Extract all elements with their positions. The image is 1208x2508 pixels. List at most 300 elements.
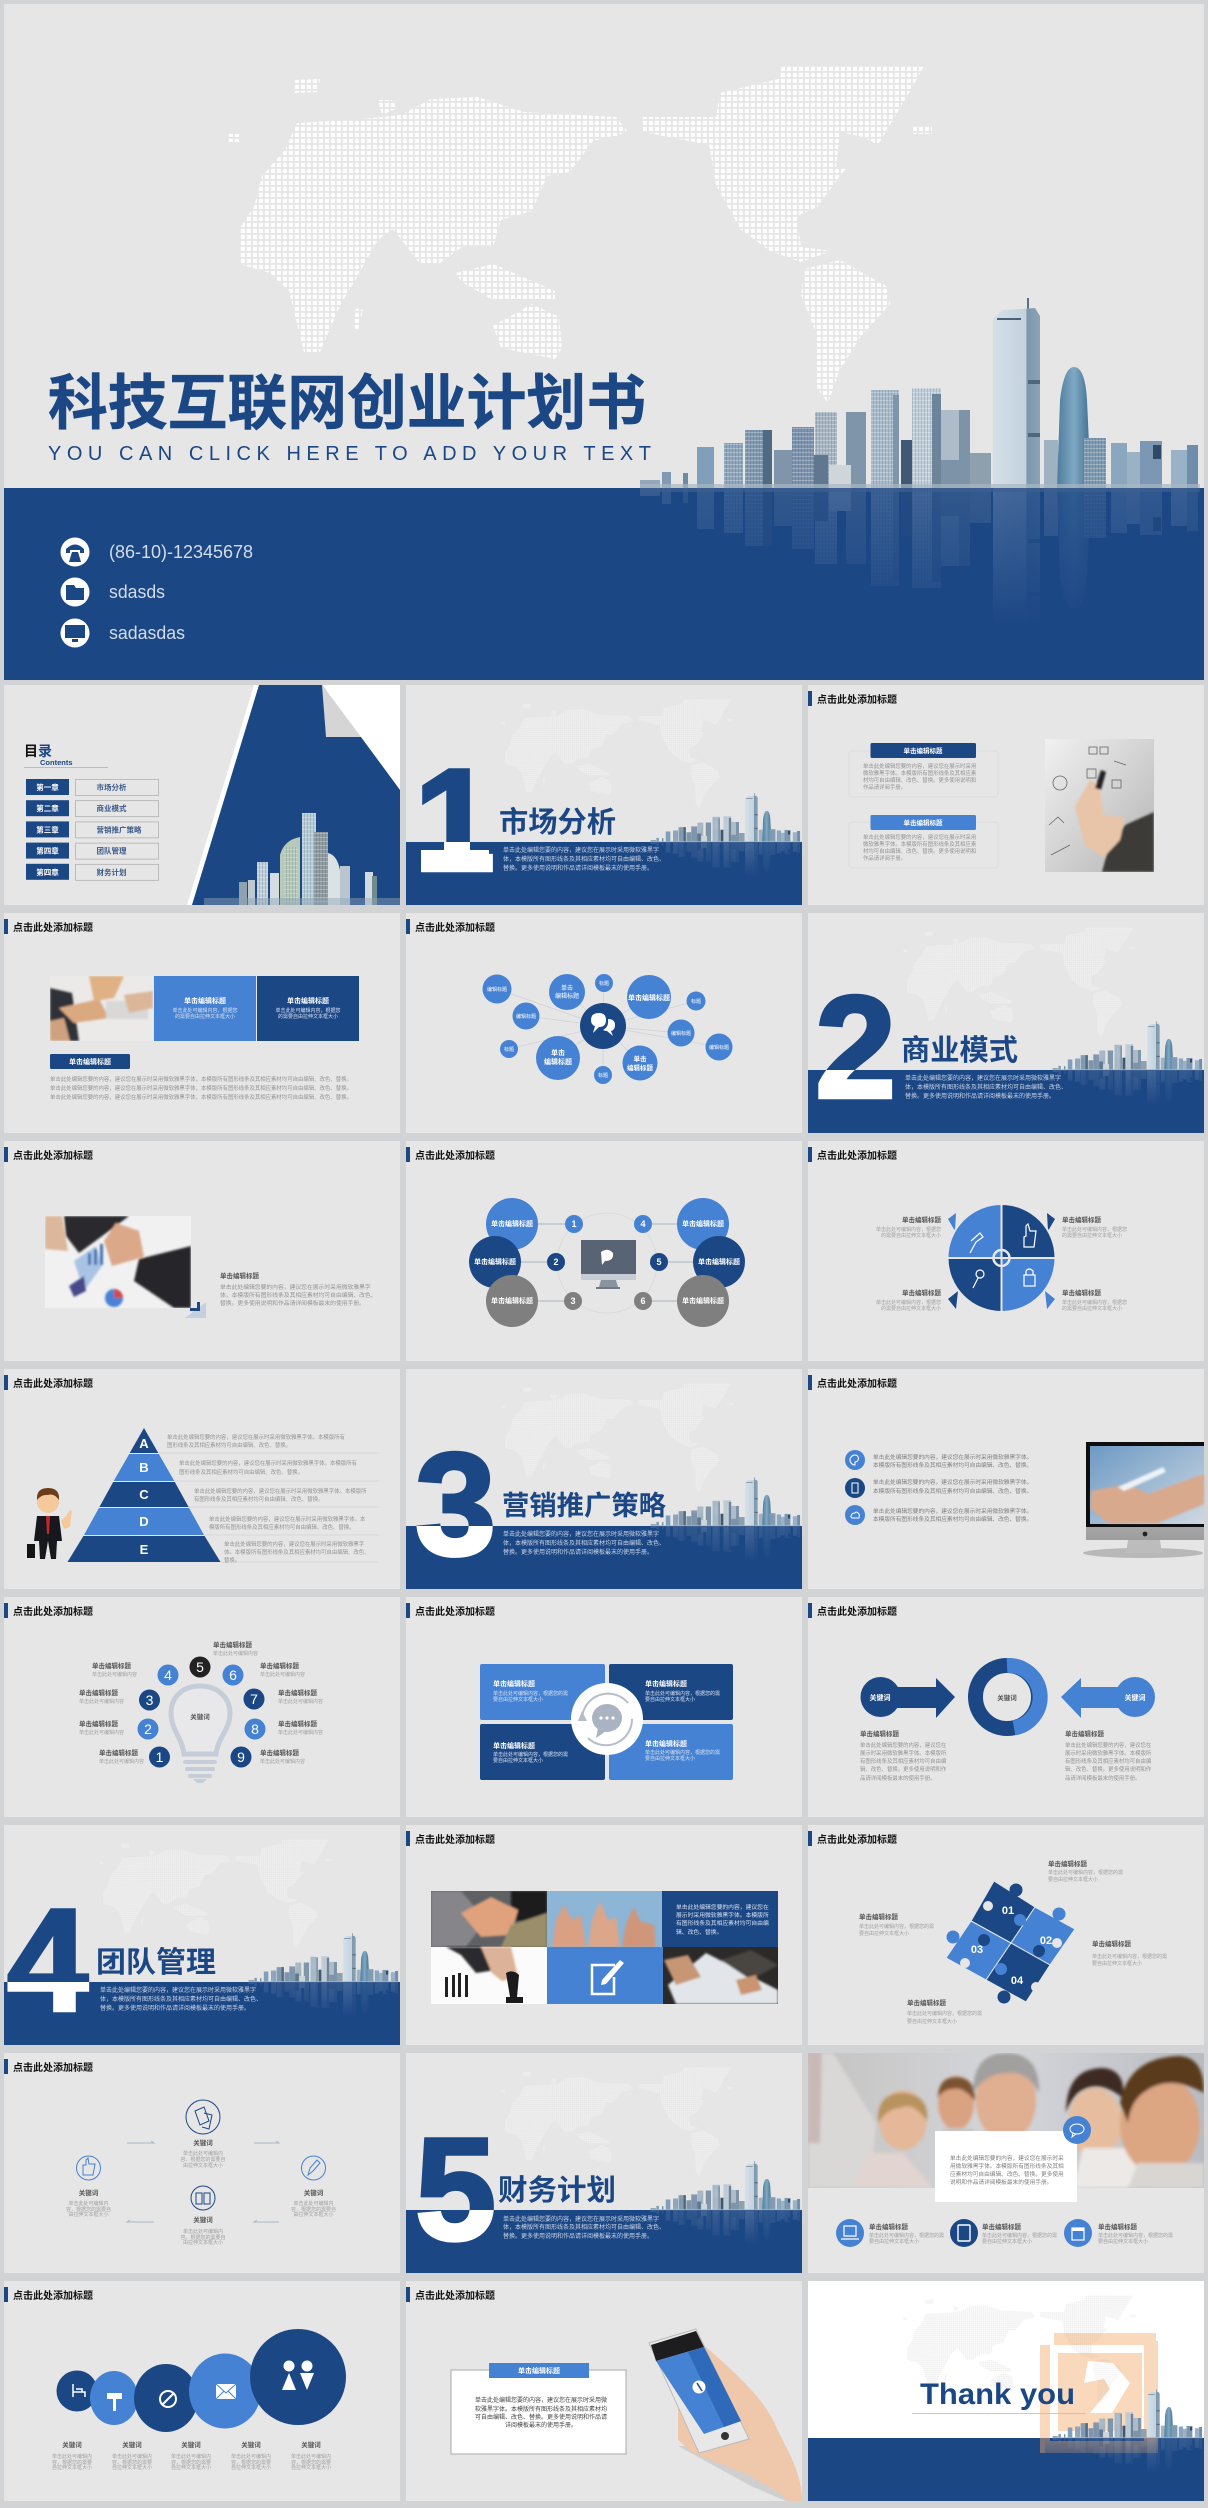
section title: 商业模式	[901, 1034, 1018, 1067]
section title: 市场分析	[499, 806, 616, 839]
box: bottom left: 单击编辑标题	[493, 1741, 535, 1750]
icon: lightbulb: 关键词	[190, 1712, 210, 1721]
photo: thumbs up	[547, 1891, 662, 1947]
arrows	[127, 2141, 279, 2222]
panel: section 1	[406, 685, 802, 905]
panel: photo and two boxes	[4, 913, 400, 1133]
header	[808, 1603, 897, 1618]
label 2: 容，根据您的需要	[112, 2459, 152, 2466]
text: E: 替换。	[224, 1556, 240, 1564]
label: top right: 单击此处可编辑内容，根据您	[1062, 1226, 1127, 1233]
node: left: 单击此处可编辑内	[68, 2200, 109, 2207]
dividers	[159, 1453, 379, 1562]
item 2	[845, 1478, 1032, 1498]
item: calendar: 单击此处可编辑内容，根据您的需	[1098, 2232, 1173, 2239]
text block: 单击此处编辑您要的内容，建议您在展示时采用微软雅黑字体，本模版所有图形线条及其相应素材均可自由编辑、改色、替换。	[50, 1093, 352, 1101]
section text: 单击此处编辑您要的内容，建议您在展示时采用微软雅黑字	[100, 1986, 256, 1994]
node: top: 由拉伸文本框大小	[183, 2162, 223, 2169]
world map	[903, 927, 1136, 1037]
box: bottom right: 要自由拉伸文本框大小	[645, 1755, 695, 1762]
label 3	[171, 2440, 211, 2471]
label: top left: 单击此处可编辑内容，根据您	[876, 1226, 941, 1233]
item: tablet: 单击编辑标题	[982, 2222, 1022, 2231]
panel: four boxes around bubble	[406, 1597, 802, 1817]
numbered dots: 6	[640, 1296, 646, 1306]
number 4	[7, 1908, 90, 2012]
label 2: 单击此处可编辑内	[112, 2453, 152, 2460]
row: chapter 4	[26, 843, 158, 859]
thank you text: Thank you	[920, 2378, 1075, 2411]
band: contact footer	[4, 488, 1204, 680]
header: 点击此处添加标题	[817, 1377, 897, 1390]
row: chapter 2: 商业模式	[96, 803, 127, 813]
header: 点击此处添加标题	[415, 2289, 495, 2302]
section text: 体，本模版所有图形线条及其相应素材均可自由编辑、改色、	[100, 1995, 262, 2003]
jigsaw numbers: 03	[971, 1944, 983, 1956]
label: right: 要自由拉伸文本框大小	[1092, 1960, 1142, 1967]
photo: hand drawing	[1045, 739, 1154, 872]
card 2: 微软雅黑字体。本模版所有图形线条及其相应素	[863, 840, 977, 848]
world map	[227, 66, 932, 403]
photo: team	[808, 2053, 1204, 2188]
card 1: 单击此处编辑您要的内容，建议您在展示时采用	[863, 762, 976, 770]
photo: handshake	[431, 1891, 547, 1947]
callout box: 可自由编辑、改色、替换。更多使用说明和作品请	[475, 2413, 607, 2421]
text block: 单击此处编辑您要的内容，建议您在展示时采用微软雅黑字	[220, 1283, 371, 1291]
text: left	[860, 1729, 947, 1782]
box: text: 辑、改色、替换。	[676, 1928, 722, 1936]
nodes: grey: 单击编辑标题	[682, 1296, 724, 1305]
labels: 单击此处可编辑内容	[79, 1729, 124, 1736]
header: 点击此处添加标题	[817, 693, 897, 706]
bubble labels: 单击	[551, 1048, 565, 1057]
item 2: 单击此处编辑您要的内容，建议您在展示时采用微软雅黑字体。	[873, 1478, 1032, 1486]
label 2	[112, 2440, 152, 2471]
node: left: 由拉伸文本框大小	[68, 2211, 109, 2218]
jigsaw pieces	[946, 1881, 1075, 2004]
nodes: grey: 单击编辑标题	[491, 1296, 533, 1305]
section text: 替换。更多使用说明和作品请详阅模板最末的使用手册。	[905, 1092, 1055, 1100]
panel: five growing circles	[4, 2281, 400, 2501]
text block	[220, 1271, 377, 1307]
pyramid	[68, 1428, 220, 1562]
box: text: 有图形线条及其相应素材均可自由编	[676, 1919, 769, 1927]
box: top left: 单击编辑标题	[493, 1679, 535, 1688]
label: left: 单击此处可编辑内容，根据您的需	[859, 1923, 934, 1930]
header	[808, 1831, 897, 1846]
text block: 单击编辑标题	[220, 1271, 260, 1280]
bubble labels: 标题	[598, 1072, 608, 1079]
label: bottom left: 单击编辑标题	[902, 1288, 942, 1297]
text: left: 单击编辑标题	[860, 1729, 900, 1738]
box: top right: 要自由拉伸文本框大小	[645, 1696, 695, 1703]
node: top	[180, 2100, 226, 2169]
box: top right	[609, 1664, 733, 1720]
button: 单击编辑标题	[69, 1057, 111, 1066]
jigsaw numbers: 04	[1011, 1975, 1024, 1987]
labels: 单击编辑标题	[278, 1688, 318, 1697]
underline	[912, 2412, 1085, 2415]
header	[808, 691, 897, 706]
text block	[50, 1075, 352, 1101]
text: right	[1065, 1729, 1152, 1782]
text: left: 单击此处编辑您要的内容，建议您在	[860, 1741, 947, 1749]
box: text: 用微软雅黑字体。本模版所有图形线条及其相	[950, 2162, 1064, 2170]
text: C	[194, 1487, 367, 1503]
panel: monitor with six nodes	[406, 1141, 802, 1361]
label 1: 关键词	[62, 2440, 82, 2449]
bubble labels: 编辑标题	[555, 992, 579, 1000]
number 5: 5	[415, 2108, 496, 2270]
item: laptop	[836, 2219, 944, 2247]
section text: 单击此处编辑您要的内容，建议您在展示时采用微软雅黑字	[503, 2215, 659, 2223]
arrow: right: 关键词	[1124, 1693, 1146, 1702]
section text: 体，本模版所有图形线条及其相应素材均可自由编辑、改色、	[503, 855, 665, 863]
network links	[497, 983, 719, 1075]
card 2: 作品请详阅手册。	[863, 854, 906, 862]
icon: speech bubble	[1063, 2116, 1091, 2144]
text: left: 展示时采用微软雅黑字体。本模版所	[860, 1749, 947, 1757]
band	[406, 2210, 802, 2273]
header	[406, 2287, 495, 2302]
numbered dots: 3	[570, 1296, 576, 1306]
section text: 替换。更多使用说明和作品请详阅模板最末的使用手册。	[100, 2004, 250, 2012]
box: text: 应素材均可自由编辑、改色、替换。更多使用	[950, 2170, 1064, 2178]
text: D	[209, 1515, 366, 1531]
header	[808, 1147, 897, 1162]
world map	[99, 1839, 332, 1949]
text: B	[179, 1459, 358, 1476]
band	[808, 2438, 1204, 2501]
panel: cover slide	[4, 4, 1204, 680]
labels: 单击编辑标题	[99, 1748, 138, 1757]
header: 点击此处添加标题	[13, 921, 93, 934]
panel: team photo	[808, 2053, 1204, 2273]
label 5	[291, 2440, 331, 2471]
panel: arrows and ring	[808, 1597, 1204, 1817]
box: text: 展示时采用微软雅黑字体。本模版所	[676, 1911, 769, 1919]
contact: folder: sdasds	[109, 582, 165, 602]
header: 点击此处添加标题	[817, 1149, 897, 1162]
row: chapter 2: 第二章	[36, 803, 59, 813]
section title: 营销推广策略	[502, 1491, 666, 1521]
bubble labels: 单击	[561, 984, 573, 992]
heading: contents: Contents	[40, 758, 72, 767]
photo: chess	[431, 1947, 547, 2004]
label 2: 关键词	[122, 2440, 142, 2449]
row: chapter 3	[26, 821, 158, 838]
node: bottom	[180, 2186, 226, 2246]
header: 点击此处添加标题	[13, 2061, 93, 2074]
section text: 替换。更多使用说明和作品请详阅模板最末的使用手册。	[503, 2232, 653, 2240]
number 3: 3	[415, 1422, 496, 1586]
circles with icons	[56, 2329, 346, 2432]
label 4: 单击此处可编辑内	[231, 2453, 271, 2460]
header: 点击此处添加标题	[415, 1605, 495, 1618]
item 1: 单击此处编辑您要的内容，建议您在展示时采用微软雅黑字体。	[873, 1453, 1032, 1461]
header: 点击此处添加标题	[415, 921, 495, 934]
band	[406, 842, 802, 905]
bubble labels: 编辑标题	[709, 1044, 729, 1051]
panel: section 5	[406, 2053, 802, 2273]
section text	[503, 1530, 665, 1556]
text: right: 品请详阅模板最末的使用手册。	[1065, 1774, 1140, 1782]
callout box: 单击此处编辑您要的内容，建议您在展示时采用微	[475, 2396, 607, 2404]
shape: grey fold	[322, 685, 361, 737]
text: C: 有图形线条及其相应素材均可自由编辑、改色、替换。	[194, 1495, 323, 1503]
numbers: 3	[146, 1692, 154, 1708]
text: D: 模版所有图形线条及其相应素材均可自由编辑、改色、替换。	[209, 1523, 355, 1531]
shape: white corner	[320, 685, 400, 790]
box: dark: 单击此处可编辑内容，根据您	[275, 1007, 341, 1014]
row: chapter 3: 营销推广策略	[96, 824, 142, 834]
text: right: 单击编辑标题	[1065, 1729, 1104, 1738]
links	[518, 1224, 696, 1301]
text: right: 辑、改色、替换。更多使用说明和作	[1065, 1765, 1152, 1773]
labels	[79, 1640, 323, 1765]
labels: 单击编辑标题	[278, 1719, 318, 1728]
label 5: 单击此处可编辑内	[291, 2453, 331, 2460]
nodes: dark: 单击编辑标题	[474, 1257, 516, 1266]
labels: 单击此处可编辑内容	[260, 1758, 305, 1765]
arrow: left	[860, 1677, 955, 1718]
bubble labels: 标题	[691, 998, 701, 1005]
row: chapter 1	[26, 779, 158, 796]
header	[808, 1375, 897, 1390]
item 1	[845, 1450, 1032, 1470]
text: E: 体。本模版所有图形线条及其相应素材均可自由编辑、改色、	[224, 1548, 370, 1556]
labels: 单击编辑标题	[79, 1688, 118, 1697]
card 1: 微软雅黑字体。本模版所有图形线条及其相应素	[863, 769, 977, 777]
numbered dots: 1	[571, 1219, 577, 1229]
section text: 体，本模版所有图形线条及其相应素材均可自由编辑、改色、	[905, 1083, 1067, 1091]
panel: phone in hand	[406, 2281, 802, 2501]
panel: photo with text	[4, 1141, 400, 1361]
node: bottom: 单击此处可编辑内	[183, 2228, 223, 2235]
number 1	[421, 768, 493, 872]
label: top: 要自由拉伸文本框大小	[1048, 1876, 1098, 1883]
section text: 单击此处编辑您要的内容，建议您在展示时采用微软雅黑字	[503, 846, 659, 854]
label: bottom right: 单击此处可编辑内容，根据您	[1062, 1299, 1127, 1306]
label 1	[52, 2440, 92, 2471]
labels: 单击此处可编辑内容	[213, 1650, 258, 1657]
header	[4, 1147, 93, 1162]
header: 点击此处添加标题	[13, 1377, 93, 1390]
bubble labels: 标题	[599, 980, 609, 987]
row: chapter 5: 第四章	[36, 867, 59, 877]
header	[4, 1603, 93, 1618]
number 2: 2	[815, 966, 896, 1128]
arrow: right	[1061, 1677, 1155, 1718]
section text: 单击此处编辑您要的内容，建议您在展示时采用微软雅黑字	[503, 1530, 659, 1538]
labels: 单击此处可编辑内容	[92, 1671, 137, 1678]
label: bottom: 单击编辑标题	[907, 1998, 946, 2007]
node: bottom: 容，根据您的需要自	[180, 2234, 226, 2241]
header	[4, 2059, 93, 2074]
callout box: 软雅黑字体。本模版所有图形线条及其相应素材均	[475, 2405, 607, 2413]
label: right: 单击此处可编辑内容，根据您的需	[1092, 1953, 1167, 1960]
label 3: 单击此处可编辑内	[171, 2453, 211, 2460]
section text: 单击此处编辑您要的内容，建议您在展示时采用微软雅黑字	[905, 1074, 1061, 1082]
panel: four-quadrant circle	[808, 1141, 1204, 1361]
number 5: 5	[415, 2108, 496, 2270]
labels: 单击编辑标题	[213, 1640, 252, 1649]
card 1: 材均可自由编辑、改色、替换。更多使用说明和	[863, 776, 976, 784]
node: right: 由拉伸文本框大小	[293, 2211, 334, 2218]
pyramid: B	[139, 1460, 149, 1475]
shape: white strip	[187, 685, 259, 905]
label: bottom	[907, 1998, 982, 2025]
header: 点击此处添加标题	[415, 1149, 495, 1162]
bubble labels: 编辑标题	[627, 1063, 654, 1072]
numbers	[138, 1656, 266, 1768]
node: bottom: 关键词	[193, 2215, 213, 2224]
labels: 单击此处可编辑内容	[99, 1758, 144, 1765]
ring and links	[557, 1213, 657, 1313]
contact: monitor: sadasdas	[109, 623, 185, 643]
label: left: 单击编辑标题	[859, 1912, 898, 1921]
arrow: left: 关键词	[870, 1693, 890, 1702]
nodes: medium	[486, 1198, 729, 1250]
box: top right: 单击此处可编辑内容，根据您的需	[645, 1690, 720, 1697]
photo: reviewing charts	[45, 1216, 191, 1308]
section title: 团队管理	[96, 1946, 216, 1979]
callout box: 单击编辑标题	[518, 2366, 560, 2375]
hand	[678, 2347, 802, 2501]
labels: 单击编辑标题	[79, 1719, 118, 1728]
jigsaw numbers	[971, 1905, 1052, 1987]
skyline with reflection	[612, 298, 1204, 678]
box: dark	[257, 976, 359, 1041]
label 1: 自拉伸文本框大小	[52, 2464, 92, 2471]
band	[808, 1070, 1204, 1133]
box: bottom right: 单击编辑标题	[645, 1739, 687, 1748]
card 2: 材均可自由编辑、改色、替换。更多使用说明和	[863, 847, 976, 855]
centre bubble icon	[580, 1003, 626, 1049]
box: top left: 单击此处可编辑内容，根据您的需	[493, 1690, 568, 1697]
box: bottom left: 要自由拉伸文本框大小	[493, 1757, 543, 1764]
numbers: 1	[156, 1749, 164, 1765]
item: calendar: 要自由拉伸文本框大小	[1098, 2238, 1148, 2245]
node: top: 单击此处可编辑内	[183, 2150, 223, 2157]
skyline	[1045, 2389, 1204, 2487]
number 2	[818, 994, 892, 1100]
hand shadow	[678, 2446, 802, 2501]
text block: 单击此处编辑您要的内容，建议您在展示时采用微软雅黑字体，本模版所有图形线条及其相应素材均可自由编辑、改色、替换。	[50, 1075, 352, 1083]
contact: folder	[60, 578, 165, 606]
label: top left: 单击编辑标题	[902, 1215, 942, 1224]
numbers: 2	[144, 1721, 152, 1737]
panel: list with desktop computer	[808, 1369, 1204, 1589]
subtitle: YOU CAN CLICK HERE TO ADD YOUR TEXT	[48, 443, 651, 465]
box: top left	[480, 1664, 605, 1720]
item: calendar	[1064, 2219, 1173, 2247]
label: top	[1048, 1859, 1123, 1883]
label: top: 单击编辑标题	[1048, 1859, 1088, 1868]
desktop computer	[1083, 1442, 1204, 1558]
watermark stamp	[1040, 2333, 1158, 2453]
numbered dots: 5	[656, 1257, 662, 1267]
numbered dots: 2	[553, 1257, 559, 1267]
item 3	[845, 1505, 1032, 1525]
bubble labels: 编辑标题	[544, 1057, 572, 1066]
item 2: 本模版所有图形线条及其相应素材均可自由编辑、改色、替换。	[873, 1487, 1032, 1495]
box: bottom left: 单击此处可编辑内容，根据您的需	[493, 1751, 568, 1758]
row: chapter 2	[26, 800, 158, 817]
panel: lightbulb ideas	[4, 1597, 400, 1817]
section text	[905, 1074, 1067, 1100]
pointers	[948, 1213, 1055, 1309]
quadrant icons	[970, 1224, 1036, 1288]
cartoon businessman	[27, 1488, 72, 1559]
label: top left	[876, 1215, 942, 1239]
skyline	[643, 793, 802, 891]
label 4: 关键词	[241, 2440, 261, 2449]
box: dark: 单击编辑标题	[287, 996, 329, 1005]
label: bottom right	[1062, 1288, 1127, 1312]
item: laptop: 单击此处可编辑内容，根据您的需	[869, 2232, 944, 2239]
bubble labels: 单击编辑标题	[628, 993, 670, 1002]
label 4: 容，根据您的需要	[231, 2459, 271, 2466]
label: right: 单击编辑标题	[1092, 1939, 1132, 1948]
world map	[501, 1383, 734, 1493]
node: bottom: 由拉伸文本框大小	[183, 2239, 223, 2246]
number 3: 3	[415, 1422, 496, 1586]
header	[406, 919, 495, 934]
text: left: 品请详阅模板最末的使用手册。	[860, 1774, 935, 1782]
label: top left: 的需要自由拉伸文本框大小	[881, 1232, 941, 1239]
header: 点击此处添加标题	[13, 1605, 93, 1618]
panel: section 4	[4, 1825, 400, 2045]
world map	[501, 2067, 734, 2177]
text: E: 单击此处编辑您要的内容，建议您在展示时采用微软雅黑字	[224, 1540, 364, 1548]
text: left: 有图形线条及其相应素材均可自由编	[860, 1757, 946, 1765]
illustration: towers	[204, 813, 400, 905]
text: E	[224, 1540, 370, 1564]
card 2: 单击编辑标题	[904, 818, 943, 827]
contact: phone: (86-10)-12345678	[109, 542, 253, 562]
labels: 单击此处可编辑内容	[278, 1698, 323, 1705]
box: medium: 单击此处可编辑内容，根据您	[172, 1007, 238, 1014]
world map	[903, 2295, 1136, 2405]
bubble labels: 编辑标题	[487, 986, 507, 993]
node: right	[291, 2156, 336, 2218]
centre bubble	[571, 1683, 643, 1755]
label 4: 自拉伸文本框大小	[231, 2464, 271, 2471]
numbered dots: 4	[640, 1219, 646, 1229]
callout box: 详阅模板最末的使用手册。	[505, 2421, 577, 2429]
node: left	[66, 2156, 111, 2218]
text: left: 辑、改色、替换。更多使用说明和作	[860, 1765, 947, 1773]
band	[406, 1526, 802, 1589]
bubble labels	[487, 980, 729, 1079]
card 1	[849, 743, 998, 797]
pyramid: A	[139, 1436, 149, 1451]
skyline	[643, 1477, 802, 1575]
bubble labels: 标题	[504, 1046, 514, 1053]
label 5: 容，根据您的需要	[291, 2459, 331, 2466]
row: chapter 3: 第三章	[36, 824, 59, 834]
icon: monitor	[581, 1240, 636, 1289]
ring	[976, 1665, 1040, 1728]
header: 点击此处添加标题	[415, 1833, 495, 1846]
text: D: 单击此处编辑您要的内容，建议您在展示时采用微软雅黑字体。本	[209, 1515, 366, 1523]
label: top: 单击此处可编辑内容，根据您的需	[1048, 1869, 1123, 1876]
label: left: 要自由拉伸文本框大小	[859, 1930, 909, 1937]
label: bottom: 单击此处可编辑内容，根据您的需	[907, 2010, 982, 2017]
heading: contents: 目录	[24, 743, 52, 759]
ring: 关键词	[997, 1693, 1017, 1702]
